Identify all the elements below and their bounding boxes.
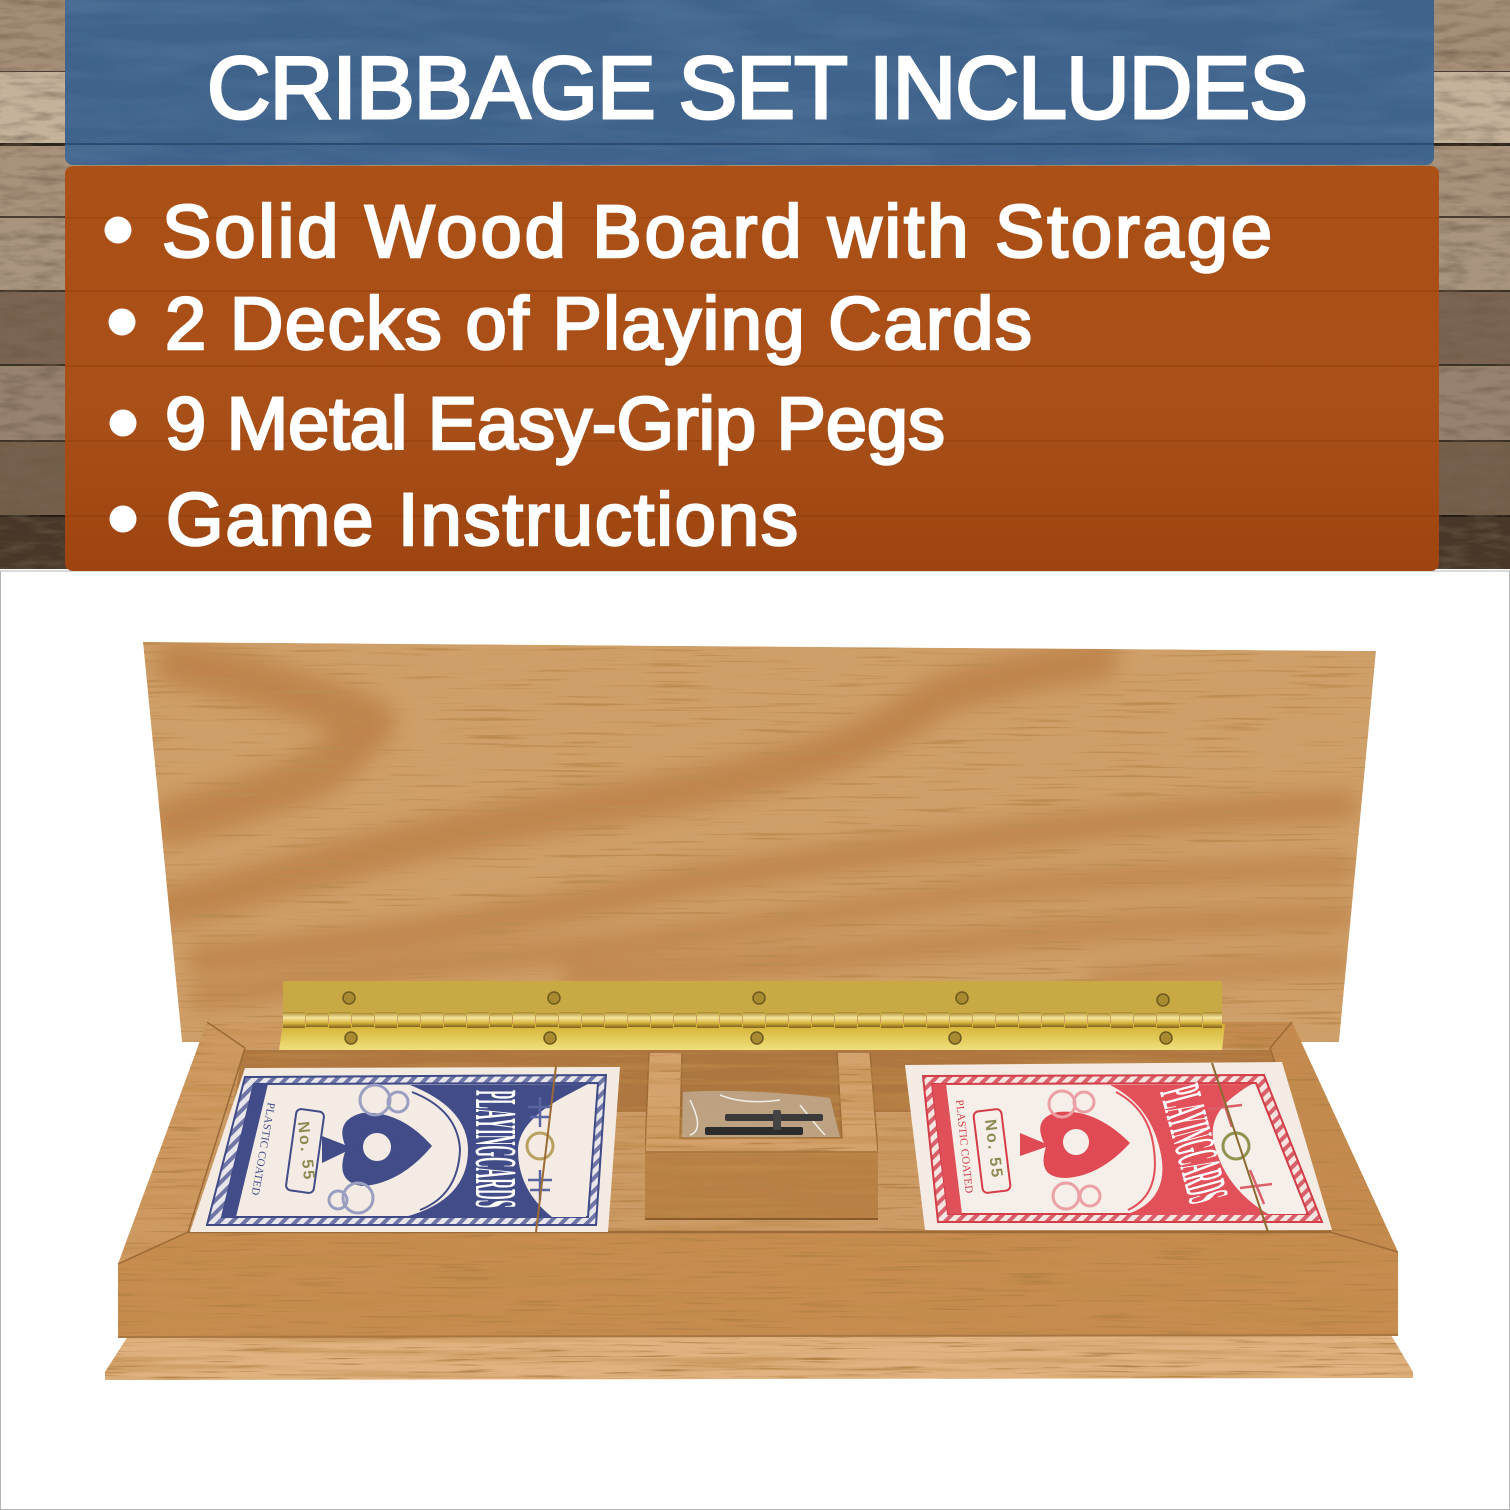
hinge bbox=[279, 981, 1225, 1050]
list item: cards: 2 Decks of Playing Cards bbox=[165, 282, 1032, 365]
blue spade bbox=[322, 1113, 432, 1186]
blue deck of cards bbox=[190, 1066, 620, 1232]
panel: contents list bbox=[65, 166, 1439, 571]
panel: title banner bbox=[65, 0, 1434, 165]
box base plate bbox=[105, 1325, 1413, 1380]
red spade bbox=[1020, 1112, 1130, 1178]
wall edges bbox=[118, 1022, 1398, 1264]
red deck of cards: No. 55 bbox=[981, 1118, 1005, 1178]
list item: instructions: Game Instructions bbox=[166, 478, 798, 561]
red deck of cards bbox=[905, 1062, 1332, 1232]
list item: board: Solid Wood Board with Storage bbox=[162, 190, 1272, 273]
wood plank backdrop bbox=[0, 0, 1510, 569]
box lid bbox=[143, 642, 1376, 1042]
list item: pegs: 9 Metal Easy-Grip Pegs bbox=[165, 382, 945, 465]
base plate front lip bbox=[118, 1335, 1398, 1337]
center peg tray bbox=[645, 1052, 878, 1219]
right wall bbox=[1215, 1022, 1398, 1252]
blue deck text: PLAYINGCARDS bbox=[463, 1090, 529, 1208]
box interior bbox=[188, 1046, 1332, 1232]
cribbage box photo bbox=[105, 642, 1413, 1380]
left wall bbox=[118, 1022, 290, 1264]
title: CRIBBAGE SET INCLUDES bbox=[207, 38, 1308, 137]
plastic bag of pegs bbox=[682, 1091, 840, 1138]
blue deck of cards: PLASTIC COATED bbox=[249, 1101, 277, 1196]
blue deck of cards: No. 55 bbox=[294, 1121, 317, 1180]
red deck text: PLAYINGCARDS bbox=[1147, 1078, 1242, 1209]
front wall bbox=[118, 1232, 1398, 1338]
red deck of cards: PLASTIC COATED bbox=[953, 1099, 975, 1194]
